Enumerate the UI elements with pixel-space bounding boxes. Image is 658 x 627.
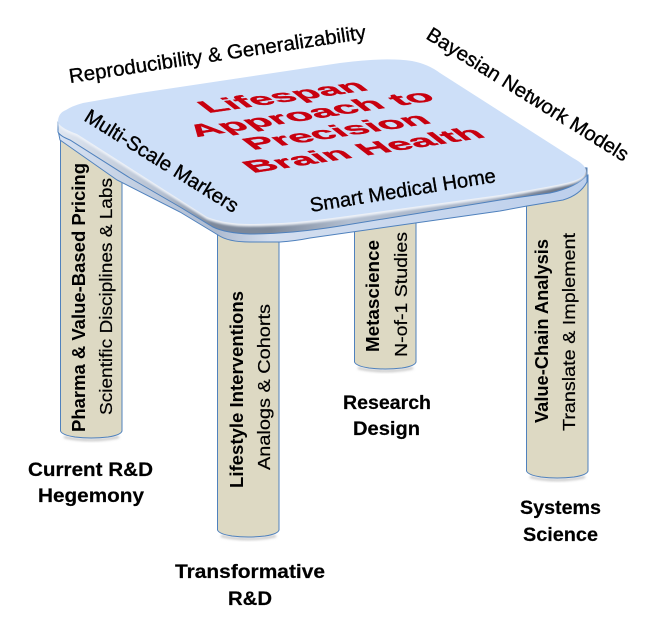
- caption: Transformative R&D: Transformative: [175, 561, 325, 583]
- label: Multi-Scale Markers: Multi-Scale Markers: [80, 106, 242, 218]
- caption: Research Design: Research: [343, 392, 431, 414]
- caption: Research Design: Design: [353, 418, 420, 440]
- caption: Research Design: [343, 392, 431, 440]
- leg: Current R&D Hegemony: [60, 125, 122, 440]
- tabletop surface: [58, 59, 586, 224]
- leg subtitle: Translate: Translate & Implement: [559, 233, 579, 431]
- label: Reproducibility & Generalizability: Reproducibility & Generalizability: [67, 22, 367, 88]
- leg: Research Design: [354, 210, 416, 371]
- caption: Systems Science: Systems: [520, 497, 601, 519]
- leg title: Value-Chain: Value-Chain Analysis: [531, 239, 552, 423]
- caption: Transformative R&D: R&D: [228, 588, 272, 610]
- title line 3: Precision: [236, 110, 438, 154]
- title line 1: Lifespan: [191, 77, 375, 117]
- label: Smart Medical Home: Smart Medical Home: [308, 165, 497, 217]
- leg title: Metascience: Metascience: [362, 240, 383, 352]
- leg subtitle: Scientific: Scientific Disciplines & Labs: [96, 178, 116, 415]
- leg: Transformative R&D: [218, 230, 279, 539]
- leg subtitle: N-of-1: N-of-1 Studies: [391, 232, 411, 357]
- leg: Systems Science: [526, 175, 588, 480]
- tabletop bevel: [58, 122, 587, 234]
- title: [180, 77, 492, 177]
- leg title: Lifestyle: Lifestyle Interventions: [226, 291, 247, 488]
- leg title: Pharma: Pharma & Value-Based Pricing: [68, 163, 89, 432]
- title line 4: Brain Health: [236, 124, 492, 177]
- tabletop underside: [58, 130, 587, 242]
- caption: Transformative R&D: [175, 561, 325, 610]
- caption: Current R&D Hegemony: [28, 459, 153, 507]
- caption: Systems Science: [520, 497, 601, 546]
- leg subtitle: Analogs: Analogs & Cohorts: [254, 304, 274, 470]
- caption: Current R&D Hegemony: Current R&D: [28, 459, 153, 481]
- label: Bayesian Network Models: Bayesian Network Models: [422, 24, 632, 166]
- title line 2: Approach to: [180, 87, 442, 141]
- tabletop: [58, 59, 587, 242]
- caption: Systems Science: Science: [523, 524, 598, 546]
- caption: Current R&D Hegemony: Hegemony: [38, 485, 144, 507]
